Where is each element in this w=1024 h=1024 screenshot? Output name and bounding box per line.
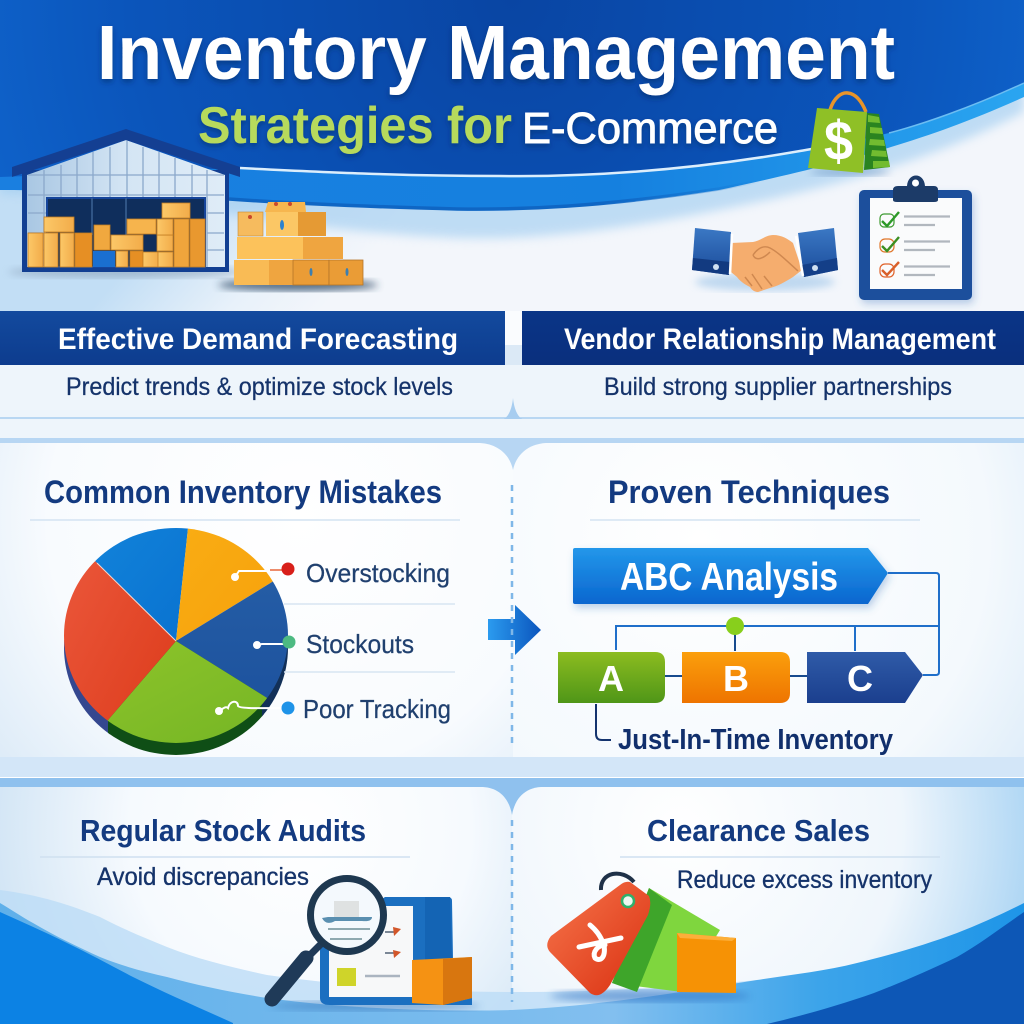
box — [412, 957, 472, 1005]
band: effective demand forecasting — [0, 311, 505, 401]
heading: mistakes: Common Inventory Mistakes — [44, 474, 442, 510]
caption: supplier partnerships: Build strong supplier partnerships — [604, 373, 952, 401]
arrow — [488, 605, 541, 655]
subtitle: E-Commerce — [522, 104, 778, 153]
caption: predict trends: Predict trends & optimize stock levels — [66, 373, 453, 401]
box b — [682, 652, 790, 703]
label: stockouts: Stockouts — [306, 629, 414, 659]
node dot — [726, 617, 744, 635]
icon: magnifier on ledger — [270, 878, 480, 1011]
caption: reduce excess: Reduce excess inventory — [677, 866, 932, 894]
label: overstocking: Overstocking — [306, 558, 450, 588]
subtitle: Strategies for — [198, 97, 512, 155]
icon: stacked boxes — [218, 202, 378, 291]
panel: regular stock audits — [0, 787, 512, 1024]
caption: discrepancies: Avoid discrepancies — [97, 863, 309, 891]
box a: A — [598, 658, 624, 699]
label: poor tracking: Poor Tracking — [303, 694, 451, 724]
box b: B — [723, 658, 749, 699]
icon: handshake — [692, 228, 838, 292]
pie chart — [64, 528, 288, 755]
subtitle — [198, 97, 778, 155]
label: stockouts — [253, 629, 414, 659]
connector lines — [596, 573, 939, 740]
icon: shopping bag — [808, 93, 890, 176]
heading: audits: Regular Stock Audits — [80, 813, 366, 848]
box c — [807, 652, 923, 703]
abc analysis — [573, 548, 888, 604]
icon: clipboard — [859, 176, 972, 300]
label: overstocking — [231, 558, 450, 588]
icon: shopping bag: $ — [824, 109, 853, 172]
abc analysis: ABC Analysis — [620, 556, 838, 599]
box c: C — [847, 658, 873, 699]
header banner — [0, 0, 1024, 238]
panel: proven techniques — [513, 443, 1024, 757]
panel: common inventory mistakes — [0, 443, 513, 757]
bottom waves — [0, 890, 1024, 1024]
label: poor tracking — [215, 694, 451, 724]
band: effective demand forecasting: Effective Demand Forecasting — [58, 323, 458, 356]
heading: techniques: Proven Techniques — [608, 474, 890, 510]
warehouse boxes — [28, 203, 205, 267]
heading: clearance: Clearance Sales — [647, 813, 870, 848]
panel: clearance sales — [512, 787, 1024, 1024]
title: Inventory Management — [97, 10, 895, 96]
just-in-time inventory: Just-In-Time Inventory — [618, 724, 893, 756]
band: vendor relationship management — [522, 311, 1024, 401]
box a — [558, 652, 665, 703]
icon: clearance tag — [547, 874, 750, 1002]
icon: warehouse — [8, 129, 244, 278]
